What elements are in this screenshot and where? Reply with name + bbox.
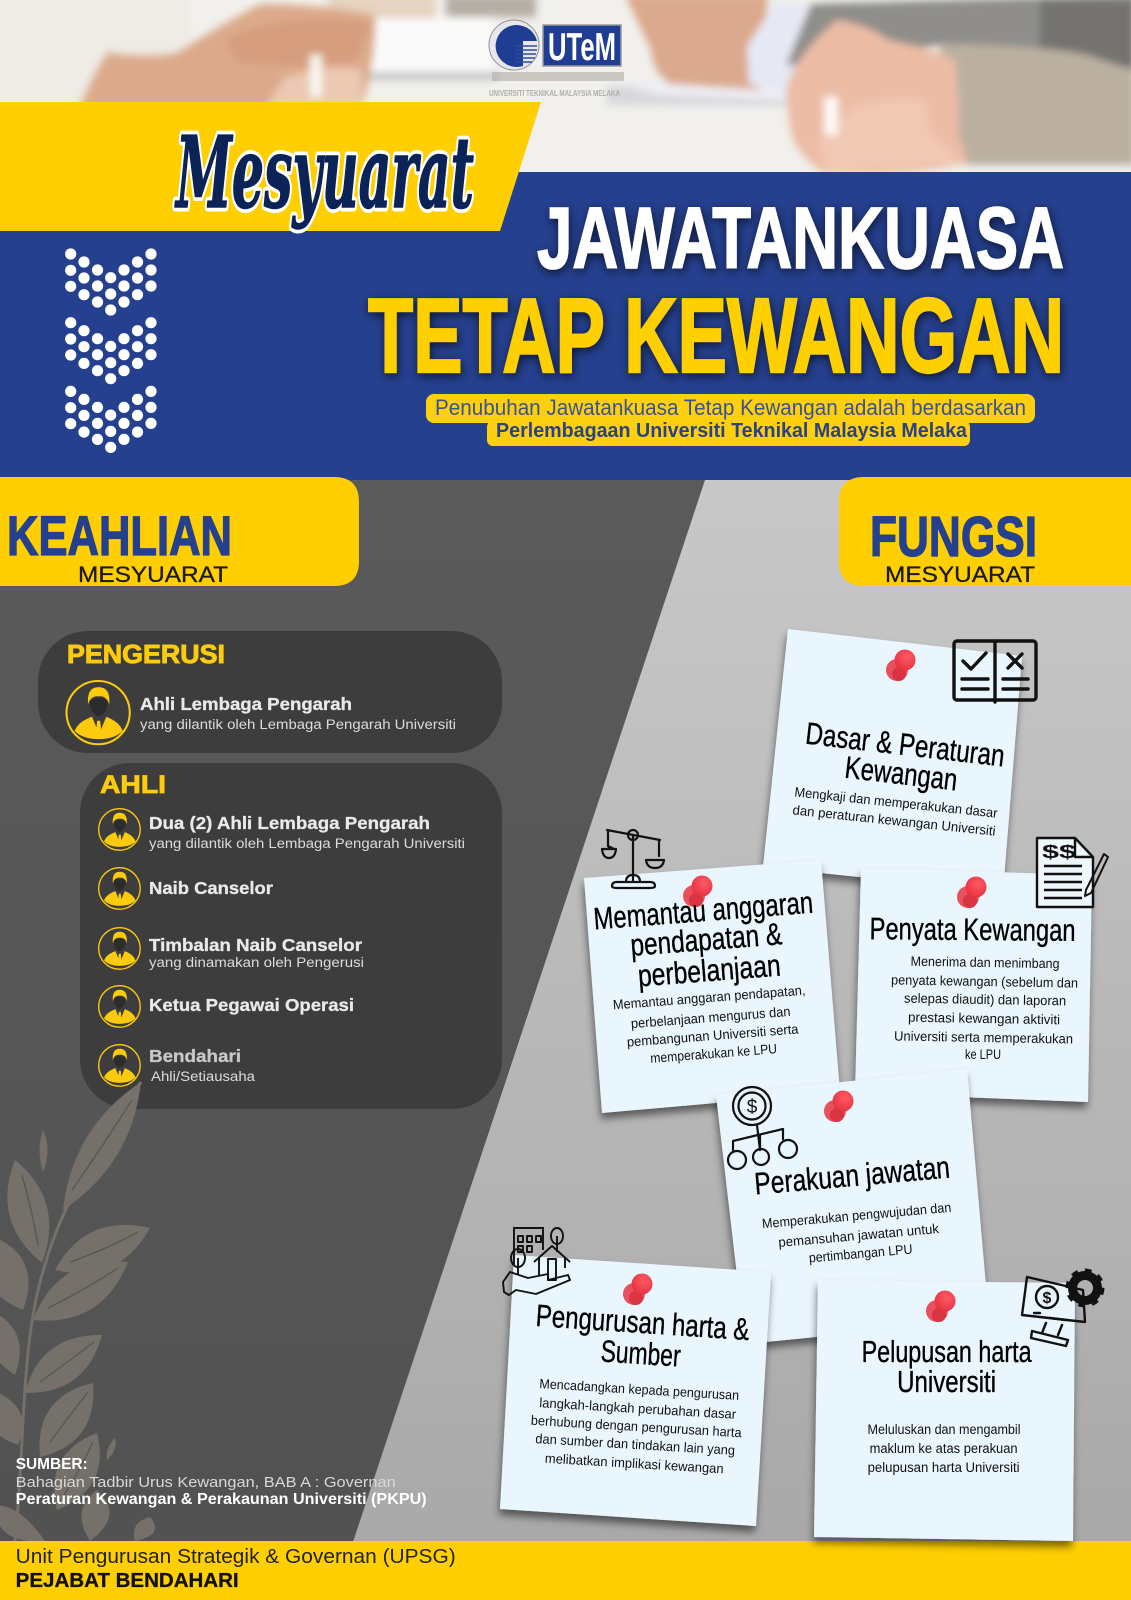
- icon: member 1: [99, 809, 140, 850]
- source note: [16, 1456, 427, 1508]
- note: pengurusan harta & sumber: dan sumber dan tindakan lain yang: [535, 1431, 736, 1458]
- note: pengurusan harta & sumber: langkah-langkah perubahan dasar: [539, 1395, 737, 1422]
- note: pengurusan harta & sumber: melibatkan implikasi kewangan: [544, 1451, 724, 1476]
- icon: member 2: [99, 868, 140, 909]
- icon: balance scale: [602, 830, 664, 888]
- icon: dollar org chart: [728, 1087, 797, 1169]
- panel: ahli: Ketua Pegawai Operasi: [149, 995, 354, 1015]
- panel: ahli: Bendahari: [149, 1046, 241, 1066]
- decorative leaf branch: [0, 1082, 155, 1541]
- blue title band: [0, 172, 1131, 480]
- note: memantau anggaran: perbelanjaan mengurus dan: [630, 1004, 791, 1031]
- note: perakuan jawatan: Memperakukan pengwujudan dan: [761, 1200, 952, 1231]
- note: penyata kewangan: prestasi kewangan aktiviti: [908, 1010, 1060, 1027]
- subtitle pills: Perlembagaan Universiti Teknikal Malaysia Melaka: [496, 420, 968, 442]
- panel: ahli: Timbalan Naib Canselor: [149, 935, 362, 955]
- panel: ahli: Naib Canselor: [149, 878, 273, 898]
- note: pelupusan harta universiti: Pelupusan harta: [862, 1334, 1032, 1369]
- icon: member 5: [99, 1045, 140, 1086]
- panel: ahli: yang dinamakan oleh Pengerusi: [149, 955, 364, 970]
- panel: ahli: Ahli/Setiausaha: [151, 1069, 256, 1084]
- icon: monitor with dollar and gear: $: [1043, 1290, 1052, 1307]
- pin: [926, 1290, 956, 1322]
- note: memantau anggaran: [584, 830, 840, 1113]
- icon: statement with dollar signs and pencil: $$: [1042, 842, 1076, 862]
- heading script: Mesyuarat: [174, 116, 474, 231]
- note: penyata kewangan: Menerima dan menimbang: [910, 954, 1060, 971]
- background: dark slanted panel: [0, 480, 705, 1542]
- subtitle pills: Penubuhan Jawatankuasa Tetap Kewangan adalah berdasarkan: [435, 395, 1026, 420]
- note: perakuan jawatan: pemansuhan jawatan untuk: [778, 1221, 940, 1250]
- tab: fungsi mesyuarat: MESYUARAT: [885, 562, 1035, 587]
- pin: [824, 1090, 854, 1122]
- source note: Peraturan Kewangan & Perakaunan Universiti (PKPU): [16, 1491, 427, 1508]
- note: memantau anggaran: pembangunan Universiti serta: [626, 1021, 799, 1050]
- background: light grey panel: [0, 480, 1131, 1542]
- note: perakuan jawatan: Perakuan jawatan: [753, 1150, 951, 1202]
- footer band: PEJABAT BENDAHARI: [16, 1570, 239, 1592]
- pin: [683, 876, 712, 907]
- panel: pengerusi: PENGERUSI: [67, 639, 225, 669]
- yellow ribbon: [0, 102, 541, 231]
- icon: open book check and cross: [954, 641, 1036, 702]
- panel: ahli: [80, 763, 502, 1109]
- source note: Bahagian Tadbir Urus Kewangan, BAB A : Governan: [16, 1474, 396, 1491]
- note: penyata kewangan: penyata kewangan (sebelum dan: [891, 972, 1078, 991]
- note: penyata kewangan: selepas diaudit) dan laporan: [904, 991, 1066, 1008]
- note: penyata kewangan: ke LPU: [965, 1047, 1001, 1062]
- note: penyata kewangan: Penyata Kewangan: [869, 911, 1076, 948]
- icon: chairman: [67, 681, 130, 744]
- panel: pengerusi: yang dilantik oleh Lembaga Pengarah Universiti: [140, 717, 456, 732]
- note: penyata kewangan: Universiti serta memperakukan: [894, 1028, 1073, 1047]
- note: pelupusan harta universiti: pelupusan harta Universiti: [868, 1460, 1020, 1475]
- UTeM logo: UNIVERSITI TEKNIKAL MALAYSIA MELAKA: [489, 89, 620, 98]
- note: memantau anggaran: Memantau anggaran pendapatan,: [612, 983, 806, 1012]
- panel: ahli: Dua (2) Ahli Lembaga Pengarah: [149, 813, 430, 833]
- header photo: hands at meeting table: [0, 0, 1131, 174]
- panel: pengerusi: Ahli Lembaga Pengarah: [140, 694, 352, 714]
- tab: keahlian mesyuarat: MESYUARAT: [78, 562, 228, 587]
- note: dasar & peraturan kewangan: Mengkaji dan memperakukan dasar: [794, 784, 999, 821]
- note: pelupusan harta universiti: Universiti: [897, 1364, 996, 1399]
- tab: fungsi mesyuarat: [839, 477, 1131, 587]
- note: dasar & peraturan kewangan: [763, 629, 1036, 892]
- pin: [623, 1274, 652, 1305]
- note: dasar & peraturan kewangan: Dasar & Peraturan: [804, 716, 1007, 773]
- note: pengurusan harta & sumber: Mencadangkan kepada pengurusan: [539, 1376, 740, 1403]
- tab: keahlian mesyuarat: KEAHLIAN: [7, 504, 232, 567]
- note: memantau anggaran: Memantau anggaran: [592, 885, 814, 936]
- icon: member 4: [99, 986, 140, 1027]
- tab: fungsi mesyuarat: FUNGSI: [870, 505, 1037, 569]
- icon: monitor with dollar and gear: [1022, 1271, 1102, 1346]
- panel: ahli: AHLI: [100, 771, 166, 799]
- source note: SUMBER:: [16, 1456, 88, 1473]
- note: pelupusan harta universiti: [814, 1271, 1102, 1541]
- note: pelupusan harta universiti: Meluluskan dan mengambil: [868, 1422, 1020, 1437]
- pin: [957, 876, 986, 908]
- note: pengurusan harta & sumber: berhubung dengan pengurusan harta: [531, 1413, 742, 1440]
- UTeM logo: [489, 20, 624, 98]
- note: dasar & peraturan kewangan: dan peraturan kewangan Universiti: [792, 802, 996, 839]
- subtitle pills: [426, 394, 1035, 446]
- heading script: Mesyuarat: Mesyuarat: [174, 116, 474, 231]
- note: memantau anggaran: perbelanjaan: [637, 948, 782, 993]
- note: penyata kewangan: [855, 838, 1108, 1102]
- icon: member 3: [99, 928, 140, 969]
- tab: keahlian mesyuarat: [0, 477, 359, 587]
- icon: hand holding property: [503, 1228, 570, 1295]
- footer band: [0, 1541, 1131, 1600]
- pin: [886, 650, 916, 681]
- chevron dots: [65, 248, 157, 453]
- icon: dollar org chart: $: [747, 1097, 758, 1118]
- icon: statement with dollar signs and pencil: [1037, 838, 1108, 907]
- note: memantau anggaran: pendapatan &: [629, 916, 784, 963]
- note: dasar & peraturan kewangan: Kewangan: [843, 750, 959, 797]
- footer band: Unit Pengurusan Strategik & Governan (UPSG): [16, 1546, 456, 1568]
- note: pengurusan harta & sumber: Sumber: [600, 1333, 682, 1374]
- UTeM logo: UTeM: [548, 26, 616, 69]
- panel: pengerusi: [38, 631, 502, 753]
- note: memantau anggaran: memperakukan ke LPU: [650, 1041, 778, 1066]
- heading script: Mesyuarat: Mesyuarat: [174, 116, 474, 231]
- note: pengurusan harta & sumber: [500, 1228, 771, 1526]
- note: perakuan jawatan: pertimbangan LPU: [808, 1242, 913, 1266]
- note: perakuan jawatan: [716, 1069, 989, 1344]
- note: pelupusan harta universiti: maklum ke atas perakuan: [870, 1441, 1018, 1456]
- note: pengurusan harta & sumber: Pengurusan harta &: [535, 1298, 751, 1347]
- panel: ahli: yang dilantik oleh Lembaga Pengarah Universiti: [149, 836, 465, 851]
